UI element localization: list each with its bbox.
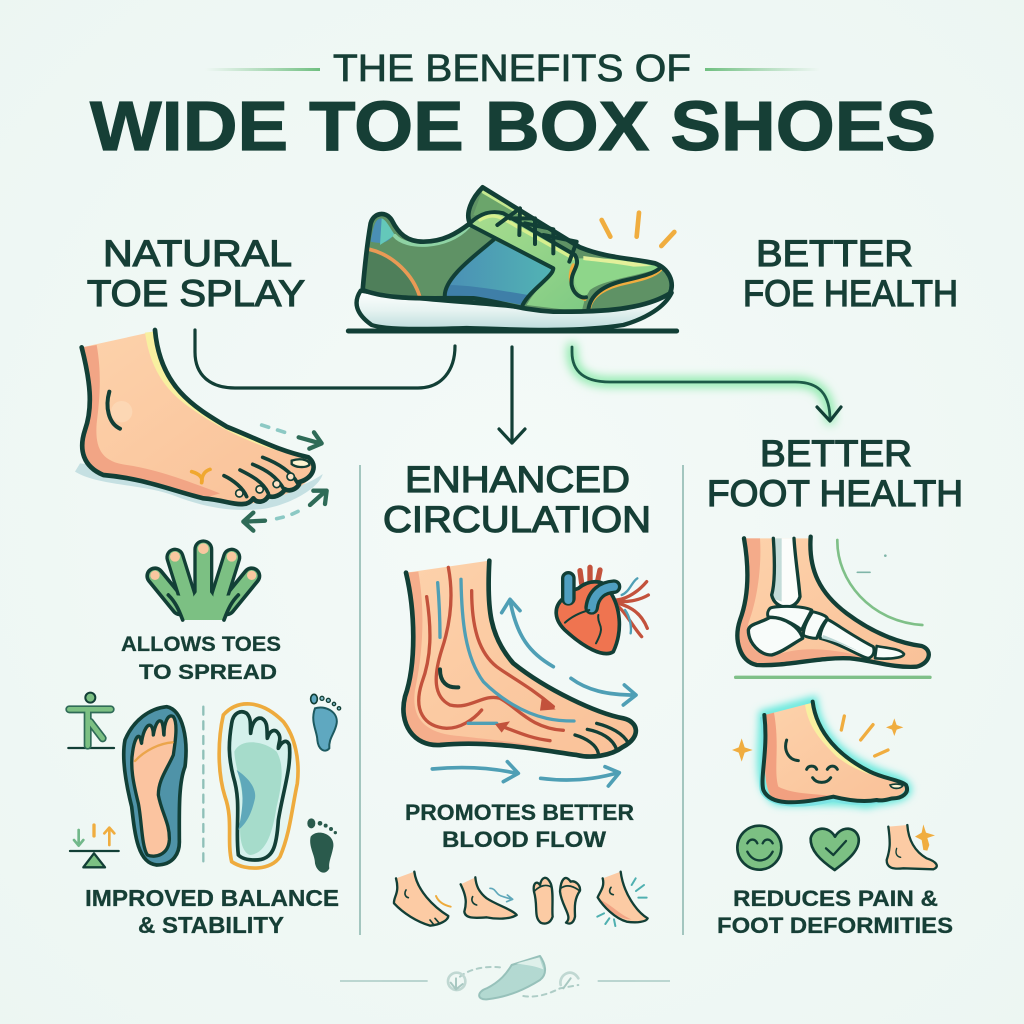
title: WIDE TOE BOX SHOES [90, 87, 936, 165]
heading: enhanced circulation: ENHANCED [405, 459, 630, 500]
connector: shoe to toe splay [195, 330, 455, 388]
icon: happy foot [887, 824, 937, 869]
title [90, 48, 936, 165]
heel counter [365, 250, 423, 298]
heading: enhanced circulation: CIRCULATION [383, 499, 651, 540]
heading: natural toe splay: NATURAL [103, 233, 292, 274]
arrow: down to circulation [499, 347, 525, 443]
icon: narrow insole [124, 707, 186, 865]
arrow: toes outward top [262, 425, 322, 449]
heading: better toe health [743, 233, 958, 314]
icon: heart check [811, 829, 859, 870]
heading: better foot health [707, 433, 963, 514]
sparks [602, 213, 674, 246]
title: THE BENEFITS OF [333, 48, 691, 90]
soothed foot with glow [761, 702, 908, 805]
caption: allows toes to spread: TO SPREAD [139, 661, 277, 684]
icon: shoe [348, 187, 677, 331]
collar highlight [395, 227, 468, 245]
ground line and curve [736, 540, 930, 677]
foot with veins [402, 561, 636, 757]
icons: small feet row [394, 872, 648, 926]
heading: better toe health: BETTER [756, 233, 913, 274]
balance and insole icons [68, 693, 341, 873]
upper base [363, 187, 672, 312]
sole [357, 291, 672, 330]
icon: spread toes [150, 543, 256, 620]
icon: wide insole [219, 704, 298, 868]
caption: promotes better blood flow: BLOOD FLOW [442, 827, 606, 852]
column dividers [360, 465, 683, 935]
toe vamp [574, 258, 660, 298]
shoe lines [363, 187, 672, 312]
ground line [348, 323, 677, 338]
blue panel [445, 240, 553, 305]
laces [497, 208, 577, 262]
caption: allows toes to spread: ALLOWS TOES [121, 633, 281, 656]
heading: natural toe splay: TOE SPLAY [87, 273, 305, 314]
caption: allows toes to spread [121, 633, 281, 684]
icon: heart [556, 567, 648, 654]
caption: improved balance [85, 885, 339, 938]
divider: dashed [200, 707, 207, 867]
heading: better foot health: BETTER [760, 433, 912, 474]
icon: seesaw [70, 825, 119, 867]
panel: enhanced circulation [383, 459, 651, 926]
caption: reduces pain [717, 886, 953, 938]
heading: natural toe splay [87, 233, 305, 314]
caption: reduces pain: FOOT DEFORMITIES [717, 913, 953, 938]
caption: improved balance: & STABILITY [138, 912, 284, 938]
heading: enhanced circulation [383, 459, 651, 540]
icon: smiley [737, 826, 781, 870]
arrows: blood flow [432, 599, 636, 786]
arrow: glowing to foot health [572, 347, 841, 421]
tongue [473, 189, 573, 245]
caption: promotes better blood flow [405, 800, 634, 852]
foot with toe splay [75, 330, 323, 510]
caption: promotes better blood flow: PROMOTES BETTER [405, 800, 634, 825]
heel patch [371, 218, 393, 243]
icon: blue footprint [311, 694, 341, 751]
sparkles and rays [732, 716, 903, 762]
eyelet panel [471, 212, 585, 312]
icon: balancing figure [68, 693, 114, 748]
heading: better toe health: FOE HEALTH [743, 273, 958, 314]
footer emblem [340, 956, 670, 999]
panel: natural toe splay [68, 330, 341, 938]
heading: better foot health: FOOT HEALTH [707, 473, 963, 514]
caption: reduces pain: REDUCES PAIN & [733, 886, 938, 911]
foot skeleton [737, 537, 929, 667]
panel: better foot health [707, 433, 963, 938]
icon: dark footprint [307, 818, 337, 873]
veins [419, 567, 563, 741]
caption: improved balance: IMPROVED BALANCE [85, 885, 339, 911]
arrow: toes outward bottom [243, 491, 327, 531]
